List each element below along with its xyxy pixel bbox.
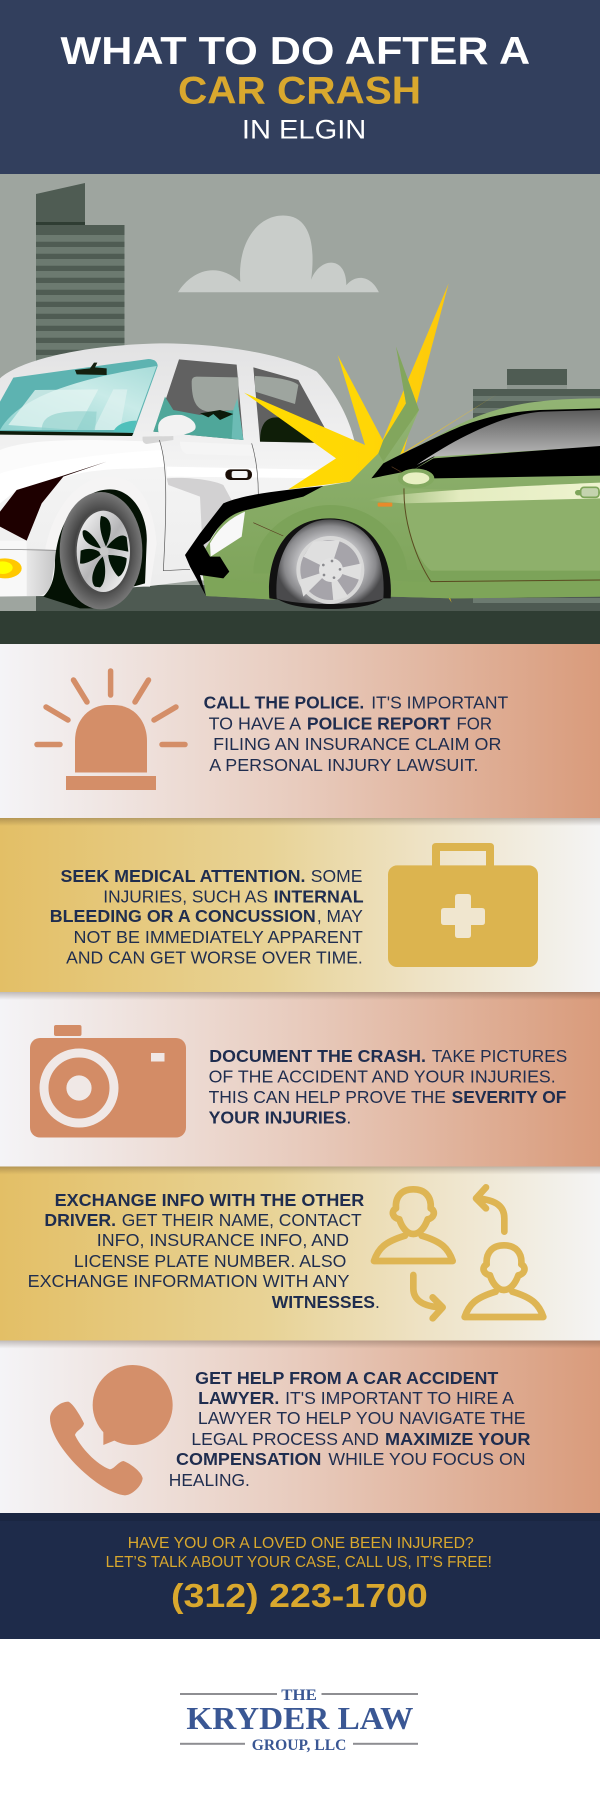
- text: exchange info: .: [375, 1292, 380, 1312]
- text: exchange info: EXCHANGE INFO WITH THE OTHER: [55, 1190, 365, 1210]
- text: seek medical attention: INJURIES, SUCH AS: [103, 886, 268, 906]
- text: seek medical attention: , MAY: [317, 906, 363, 926]
- text: document the crash: TAKE PICTURES: [432, 1046, 567, 1066]
- text: call the police: IT'S IMPORTANT: [371, 693, 508, 713]
- call to action line one: HAVE YOU OR A LOVED ONE BEEN INJURED?: [128, 1535, 474, 1552]
- front wheel: [43, 489, 147, 609]
- door details: [167, 478, 233, 563]
- panel: get help from a lawyer: [0, 1340, 600, 1513]
- text: call the police: TO HAVE A: [209, 714, 302, 734]
- text: get help from a lawyer: LAWYER.: [198, 1388, 279, 1408]
- text: get help from a lawyer: MAXIMIZE YOUR: [385, 1429, 531, 1449]
- text: get help from a lawyer: LEGAL PROCESS AND: [191, 1429, 379, 1449]
- building left: [36, 183, 124, 385]
- text: seek medical attention: AND CAN GET WORSE OVER TIME.: [66, 948, 363, 968]
- panel: exchange info: [0, 1166, 600, 1340]
- text: exchange info: WITNESSES: [272, 1292, 375, 1312]
- text: document the crash: YOUR INJURIES: [209, 1107, 346, 1127]
- text: exchange info: LICENSE PLATE NUMBER. ALSO: [74, 1251, 346, 1271]
- logo: the kryder law group: KRYDER LAW: [186, 1700, 413, 1736]
- text: call the police: FILING AN INSURANCE CLAIM OR: [213, 734, 501, 754]
- logo: the kryder law group: [0, 1639, 600, 1798]
- title line two: CAR CRASH: [178, 70, 421, 113]
- text: call the police: [204, 693, 508, 775]
- building right: [473, 369, 600, 604]
- text: get help from a lawyer: HEALING.: [169, 1470, 250, 1490]
- text: get help from a lawyer: GET HELP FROM A CAR ACCIDENT: [195, 1368, 499, 1388]
- side windows: [153, 359, 333, 443]
- text: document the crash: THIS CAN HELP PROVE THE: [209, 1087, 446, 1107]
- hood damage: [0, 462, 107, 541]
- text: document the crash: [209, 1046, 567, 1127]
- logo: the kryder law group: THE: [281, 1687, 317, 1704]
- window: [371, 408, 600, 478]
- text: call the police: A PERSONAL INJURY LAWSUIT.: [209, 755, 478, 775]
- crumpled bumper: [185, 486, 323, 596]
- text: get help from a lawyer: COMPENSATION: [176, 1449, 321, 1469]
- text: get help from a lawyer: [169, 1368, 531, 1490]
- header banner: [0, 0, 600, 174]
- icon: two people exchanging info: [374, 1187, 543, 1318]
- text: exchange info: GET THEIR NAME, CONTACT: [122, 1210, 362, 1230]
- text: call the police: FOR: [456, 714, 492, 734]
- flat tire: [269, 518, 391, 609]
- side mirror: [398, 469, 434, 488]
- panel: call the police: [0, 644, 600, 818]
- side door panel: [404, 488, 600, 571]
- text: exchange info: [28, 1190, 380, 1312]
- text: exchange info: EXCHANGE INFORMATION WITH ANY: [28, 1271, 350, 1291]
- text: seek medical attention: [50, 866, 364, 968]
- panel: seek medical attention: [0, 818, 600, 992]
- logo: the kryder law group: GROUP, LLC: [252, 1737, 346, 1754]
- icon: phone and speech bubble: [50, 1365, 173, 1495]
- text: call the police: CALL THE POLICE.: [204, 693, 364, 713]
- wheel arch: [43, 477, 157, 593]
- mirror: [142, 415, 196, 444]
- white car: [0, 343, 367, 609]
- cloud: [178, 216, 379, 292]
- text: document the crash: DOCUMENT THE CRASH.: [209, 1046, 426, 1066]
- text: get help from a lawyer: WHILE YOU FOCUS ON: [328, 1449, 526, 1469]
- windshield: [0, 359, 158, 436]
- text: seek medical attention: SOME: [311, 866, 362, 886]
- call to action line two: LET’S TALK ABOUT YOUR CASE, CALL US, IT’S FREE!: [106, 1554, 492, 1571]
- subtitle: IN ELGIN: [242, 114, 366, 144]
- text: get help from a lawyer: IT'S IMPORTANT TO HIRE A: [285, 1388, 514, 1408]
- fog light: [0, 558, 22, 578]
- illustration: car crash scene: [0, 174, 600, 644]
- green car: [185, 347, 600, 609]
- panel: document the crash: [0, 992, 600, 1166]
- highlight stripe: [368, 483, 600, 503]
- text: exchange info: INFO, INSURANCE INFO, AND: [97, 1230, 349, 1250]
- text: document the crash: SEVERITY OF: [452, 1087, 567, 1107]
- text: seek medical attention: SEEK MEDICAL ATTENTION.: [60, 866, 306, 886]
- text: document the crash: .: [346, 1107, 351, 1127]
- icon: siren: [37, 671, 185, 790]
- impact burst: [244, 283, 498, 603]
- text: document the crash: OF THE ACCIDENT AND YOUR INJURIES.: [209, 1066, 556, 1086]
- footer call to action: [0, 1513, 600, 1639]
- text: seek medical attention: NOT BE IMMEDIATELY APPARENT: [74, 927, 363, 947]
- icon: camera: [30, 1025, 186, 1138]
- text: get help from a lawyer: LAWYER TO HELP YOU NAVIGATE THE: [198, 1408, 526, 1428]
- phone number: (312) 223-1700: [171, 1577, 428, 1614]
- front fender arch: [253, 505, 600, 583]
- text: seek medical attention: BLEEDING OR A CONCUSSION: [50, 906, 316, 926]
- text: seek medical attention: INTERNAL: [274, 886, 364, 906]
- ground: [0, 585, 600, 644]
- icon: medical kit: [388, 843, 538, 967]
- text: call the police: POLICE REPORT: [307, 714, 451, 734]
- title line one: WHAT TO DO AFTER A: [60, 30, 530, 73]
- text: exchange info: DRIVER.: [44, 1210, 116, 1230]
